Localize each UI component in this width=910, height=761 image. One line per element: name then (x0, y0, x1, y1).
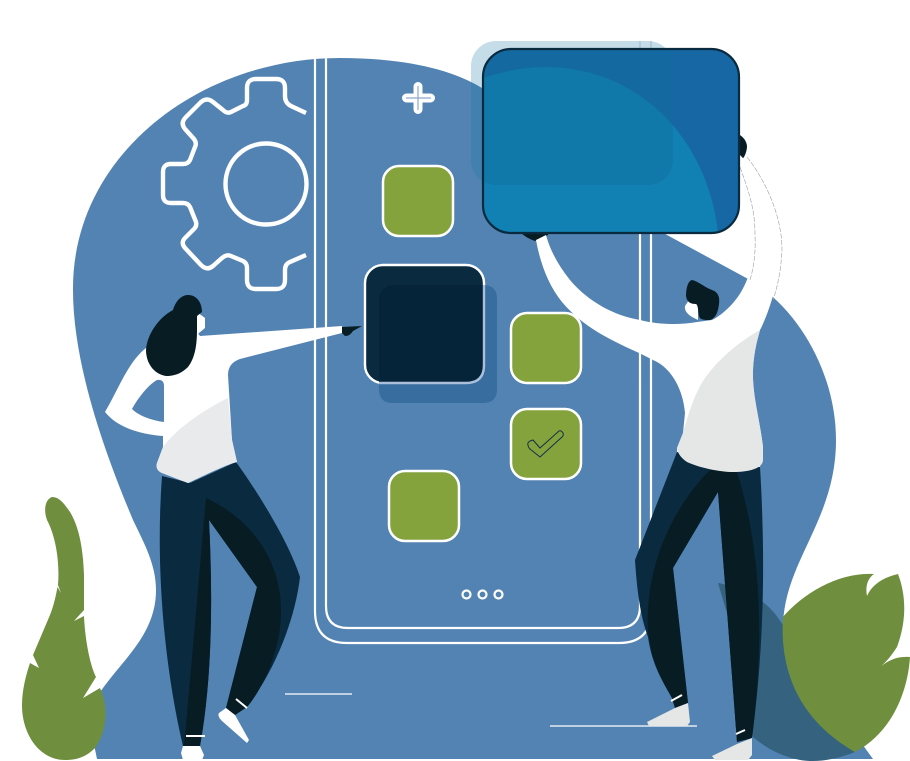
woman: sweater (105, 320, 342, 483)
app tile: green middle (511, 313, 581, 383)
man: sweater and raised arms (536, 155, 782, 472)
phone outline (315, 50, 651, 643)
man: ankle bands (671, 695, 745, 734)
plant left (22, 497, 105, 760)
woman: hair (146, 295, 202, 376)
man: feet (647, 703, 752, 760)
card: inner overlap (484, 67, 673, 185)
ground lines (285, 694, 697, 726)
icon: plus (406, 86, 431, 110)
man: trousers (635, 452, 763, 742)
woman figure (105, 295, 362, 760)
man: hair (686, 280, 719, 320)
man figure (520, 132, 782, 760)
woman: trousers (160, 462, 300, 746)
app tile: green bottom (389, 471, 459, 541)
app tile: green with check (511, 409, 581, 479)
woman: ankle bands (186, 699, 247, 736)
card: offset shadow (471, 41, 673, 185)
pagination dots (462, 590, 502, 598)
card: outline (483, 49, 739, 233)
app tile: green top (383, 166, 453, 236)
card: body (483, 49, 739, 233)
man: hands (520, 132, 747, 241)
plant right shadow (718, 583, 855, 761)
card: lighter curve (483, 67, 718, 233)
icon: gear (163, 79, 306, 289)
app tile: selected dark (365, 265, 497, 403)
man: face (685, 300, 698, 320)
plant right (783, 574, 910, 752)
woman: face (195, 312, 205, 336)
woman: pointing hand (342, 326, 362, 336)
woman: feet (181, 708, 249, 760)
floating card (471, 41, 739, 233)
